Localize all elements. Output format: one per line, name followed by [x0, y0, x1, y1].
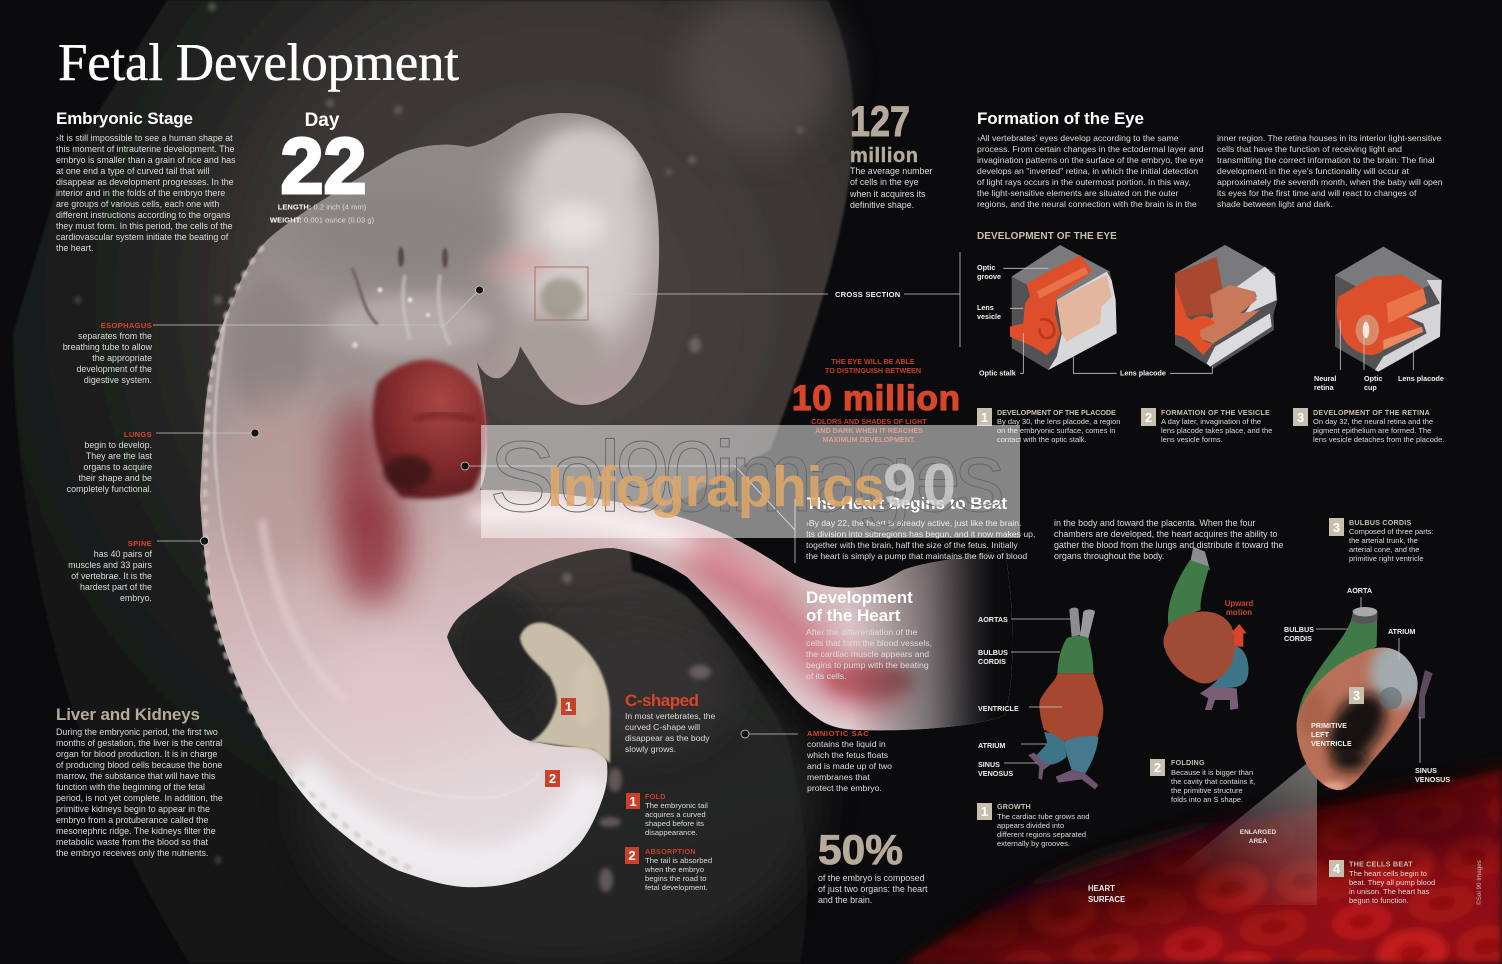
callout: amniotic sac: which the fetus floats — [806, 750, 889, 760]
day 22 badge: Day — [305, 110, 340, 131]
embryo — [200, 113, 1020, 887]
step 2: vesicle — [1141, 408, 1272, 444]
step 1: placode: contact with the optic stalk. — [997, 435, 1087, 444]
step: absorption: when the embryo — [644, 865, 704, 874]
stat: 127 million: 127 — [850, 98, 910, 146]
panel: liver and kidneys: metabolic waste from the blood so that — [56, 837, 208, 847]
heart stage 3 labels: VENOSUS — [1415, 775, 1450, 784]
callout: spine: of vertebrae. It is the — [71, 571, 152, 581]
panel: development of the heart: After the differentiation of the — [806, 627, 918, 637]
day 22 badge: WEIGHT: 0.001 ounce (0.03 g) — [270, 216, 375, 224]
tail markers — [545, 698, 576, 787]
heart stage 1 labels — [978, 615, 1070, 778]
step: folding: FOLDING — [1171, 758, 1205, 767]
panel: liver and kidneys: mesonephric ridge. The kidneys filter the — [56, 826, 216, 836]
step: folding — [1150, 758, 1255, 804]
panel: the heart begins to beat: chambers are developed, the heart acquires the ability to — [1054, 529, 1278, 539]
step 1: placode: By day 30, the lens placode, a region — [997, 417, 1120, 426]
heart surface label: SURFACE — [1088, 895, 1125, 904]
panel: embryonic stage — [56, 109, 236, 253]
copyright: ©Sol 90 Images — [1475, 860, 1483, 905]
eye diagram labels: Lens — [977, 303, 994, 312]
panel: development of the heart: cells that form the blood vessels, — [806, 638, 932, 648]
embryo body — [200, 113, 1012, 887]
tail markers: 1 — [565, 699, 572, 714]
panel: liver and kidneys: Liver and Kidneys — [56, 705, 200, 724]
callout: amniotic sac: AMNIOTIC SAC — [807, 729, 869, 738]
stat: 50 percent: of just two organs: the heart — [818, 884, 928, 894]
text block: are groups of various cells, each one with — [56, 199, 219, 209]
panel: the heart begins to beat: Its division into subregions has begun, and it now makes up, — [806, 529, 1035, 539]
panel: development of the heart: Development — [806, 588, 913, 607]
step: growth: The cardiac tube grows and — [997, 812, 1090, 821]
stat: 127 million — [849, 98, 932, 210]
step: growth: appears divided into — [997, 821, 1064, 830]
tail markers: 2 — [549, 771, 556, 786]
panel: formation of the eye: the light-sensitive elements are situated on the outer — [977, 188, 1178, 198]
callout: esophagus: the appropriate — [92, 353, 152, 363]
step: folding: the cavity that contains it, — [1171, 777, 1255, 786]
heart stage 3 labels: PRIMITIVE — [1311, 721, 1347, 730]
heart stage 3 — [1297, 607, 1433, 791]
text block: they must form. In this period, the cells of the — [56, 221, 233, 231]
callout: spine: hardest part of the — [80, 582, 152, 592]
enlarged area cone — [1160, 755, 1317, 905]
step 3: retina: pigment epithelium are formed. The — [1313, 426, 1431, 435]
callout: lungs: They are the last — [86, 451, 153, 461]
arrow: upward motion — [1231, 624, 1247, 647]
text block: different instructions according to the organs — [56, 210, 231, 220]
panel: development of the heart: the cardiac muscle appears and — [806, 649, 929, 659]
day 22 badge — [270, 110, 375, 224]
watermark panel: Sol90images — [489, 421, 1005, 533]
heart stage 1 labels: AORTAS — [978, 615, 1008, 624]
step 3: retina: 3 — [1297, 410, 1304, 425]
heart stage 1 labels: CORDIS — [978, 657, 1006, 666]
panel: the heart begins to beat: the heart is simply a pump that maintains the flow of blood — [806, 551, 1027, 561]
step 3: retina: On day 32, the neural retina and the — [1313, 417, 1433, 426]
panel: development of the heart: of the Heart — [806, 606, 901, 625]
callout: amniotic sac: contains the liquid in — [807, 739, 886, 749]
heart surface — [890, 760, 1502, 964]
step: the cells beat: 4 — [1333, 861, 1341, 876]
step: folding: Because it is bigger than — [1171, 768, 1253, 777]
callout: amniotic sac — [741, 729, 892, 793]
text block: this moment of intrauterine development. The — [56, 144, 234, 154]
panel: C-shaped: In most vertebrates, the — [625, 711, 715, 721]
step 3: retina: DEVELOPMENT OF THE RETINA — [1313, 408, 1430, 417]
heart stage 3 labels: ATRIUM — [1388, 627, 1415, 636]
text block: embryo is smaller than a grain of rice and has — [56, 155, 236, 165]
panel: the heart begins to beat: gather the blood from the lungs and distribute it toward the — [1054, 540, 1283, 550]
eye diagram labels: retina — [1314, 383, 1335, 392]
step: absorption: The tail is absorbed — [645, 856, 712, 865]
stat: 10 million: MAXIMUM DEVELOPMENT. — [822, 435, 916, 444]
callout: lungs: their shape and be — [78, 473, 152, 483]
stat: 50 percent: 50% — [818, 826, 903, 873]
panel: formation of the eye: Formation of the Eye — [977, 109, 1144, 128]
panel: C-shaped: C-shaped — [625, 691, 699, 710]
panel: formation of the eye: inner region. The retina houses in its interior light-sensitive — [1217, 133, 1442, 143]
heart stage 3 labels: LEFT — [1311, 730, 1330, 739]
panel: development of the heart: begins to pump with the beating — [806, 660, 929, 670]
step 2: vesicle: FORMATION OF THE VESICLE — [1161, 408, 1270, 417]
step: growth: different regions separated — [997, 830, 1086, 839]
step: growth: 1 — [981, 804, 988, 819]
panel: formation of the eye: approximately the seventh month, when the baby will open — [1217, 177, 1443, 187]
heart stage 3 labels: BULBUS — [1284, 625, 1314, 634]
text block: ›It is still impossible to see a human shape at — [56, 133, 233, 143]
stat: 10 million: 10 million — [792, 379, 960, 418]
eye diagram 1 — [1010, 245, 1117, 370]
text block: the heart. — [56, 243, 94, 253]
callout: esophagus: digestive system. — [84, 375, 152, 385]
step: absorption: ABSORPTION — [645, 847, 696, 856]
heart stage 1 labels: BULBUS — [978, 648, 1008, 657]
step: fold: disappearance. — [645, 828, 698, 837]
eye diagram labels: Optic stalk — [979, 368, 1016, 378]
step: bulbus cordis — [1329, 518, 1434, 563]
panel: the heart begins to beat — [806, 494, 1283, 561]
eye diagram labels: vesicle — [977, 312, 1001, 321]
step: growth: externally by grooves. — [997, 839, 1070, 848]
heart stage 1: growth — [1028, 608, 1103, 789]
callout: spine: has 40 pairs of — [94, 549, 153, 559]
callout: spine: embryo. — [120, 593, 152, 603]
step 1: placode: 1 — [981, 410, 988, 425]
panel: C-shaped — [625, 691, 715, 754]
step: the cells beat: THE CELLS BEAT — [1349, 860, 1413, 868]
panel: liver and kidneys: embryo from a protuberance called the — [56, 815, 208, 825]
step: folding: the primitive structure — [1171, 786, 1243, 795]
step 1: placode: DEVELOPMENT OF THE PLACODE — [997, 408, 1116, 417]
eye diagram labels: Optic — [1364, 374, 1382, 383]
panel: formation of the eye: develops an "inverted" retina, in which the initial detection — [977, 166, 1198, 176]
eye diagram labels: Neural — [1314, 374, 1336, 383]
step: bulbus cordis: BULBUS CORDIS — [1349, 518, 1412, 527]
panel: C-shaped: disappear as the body — [625, 733, 710, 743]
panel: liver and kidneys: of producing blood cells because the bone — [56, 760, 222, 770]
stat: 50 percent: of the embryo is composed — [818, 873, 925, 883]
stat: 127 million: when it acquires its — [849, 189, 926, 199]
panel: liver and kidneys: During the embryonic period, the first two — [56, 727, 218, 737]
stat: 10 million — [792, 357, 960, 444]
callout line: heart — [461, 462, 795, 563]
watermark panel: Infographics — [547, 455, 885, 519]
text block: disappear as development progresses. In the — [56, 177, 234, 187]
step 2: vesicle: lens placode takes place, and the — [1161, 426, 1272, 435]
step: bulbus cordis: 3 — [1333, 520, 1340, 535]
enlarged area label: AREA — [1249, 838, 1268, 845]
tail C-shape — [520, 623, 610, 763]
panel: liver and kidneys: function with the beginning of the fetal — [56, 782, 205, 792]
enlarged area label: ENLARGED — [1240, 829, 1277, 836]
panel: development of the heart: of its cells. — [806, 671, 847, 681]
panel: formation of the eye — [977, 109, 1443, 242]
callout: amniotic sac: membranes that — [807, 772, 870, 782]
eye diagram labels: groove — [977, 272, 1001, 281]
day 22 badge: LENGTH: 0.2 inch (4 mm) — [278, 202, 367, 212]
stat: 127 million: The average number — [850, 166, 932, 176]
eye diagram 2 — [1175, 245, 1277, 368]
panel: the heart begins to beat: together with the brain, half the size of the fetus. Initially — [806, 540, 1018, 550]
panel: C-shaped: slowly grows. — [625, 744, 676, 754]
panel: formation of the eye: transmitting the correct information to the brain. The final — [1217, 155, 1435, 165]
text block: cardiovascular system initiate the beating of — [56, 232, 229, 242]
heart surface label: HEART — [1088, 884, 1115, 893]
step 1: placode — [977, 408, 1120, 444]
embryo shading — [215, 130, 1020, 868]
panel: the heart begins to beat: The Heart Begins to Beat — [806, 494, 1007, 513]
stat: 10 million: TO DISTINGUISH BETWEEN — [825, 366, 921, 375]
heart stage 3 labels: SINUS — [1415, 766, 1437, 775]
callout: spine: SPINE — [128, 539, 152, 548]
callout: lungs: completely functional. — [67, 484, 152, 494]
heart stage 1 labels: VENTRICLE — [978, 704, 1019, 713]
eye diagram labels: cup — [1364, 383, 1377, 392]
panel: formation of the eye: regions, and the neural connection with the brain is in the — [977, 199, 1197, 209]
panel: formation of the eye: development in the eye's functionality will occur at — [1217, 166, 1410, 176]
heart stage 1 labels: VENOSUS — [978, 769, 1013, 778]
callout: amniotic sac: and is made up of two — [807, 761, 892, 771]
cross section marker: CROSS SECTION — [835, 290, 900, 299]
panel: formation of the eye: its eyes for the first time and will react to changes of — [1217, 188, 1417, 198]
step: growth — [977, 802, 1090, 848]
stat: 127 million: of cells in the eye — [850, 177, 919, 187]
panel: liver and kidneys — [56, 705, 223, 858]
step: the cells beat: in unison. The heart has — [1349, 887, 1430, 896]
eye diagram labels: Lens placode — [1398, 374, 1444, 383]
eye diagram leader lines — [1003, 268, 1413, 373]
panel: formation of the eye: DEVELOPMENT OF THE EYE — [977, 231, 1117, 242]
panel: formation of the eye: ›All vertebrates' eyes develop according to the same — [977, 133, 1179, 143]
panel: formation of the eye: process. From certain changes in the ectodermal layer and — [977, 144, 1204, 154]
amniotic sac — [13, 0, 854, 964]
heart stage 3 labels: VENTRICLE — [1311, 739, 1352, 748]
panel: formation of the eye: of light rays occurs in the outermost portion. In this way, — [977, 177, 1191, 187]
step: fold: shaped before its — [645, 819, 704, 828]
upward motion label: Upward — [1225, 599, 1254, 608]
cross section marker — [535, 252, 960, 347]
step: bulbus cordis: arterial cone, and the — [1349, 545, 1419, 554]
day 22 badge: 22 — [280, 121, 366, 210]
heart stage 2: folding — [1163, 547, 1249, 710]
floating particles — [75, 3, 803, 892]
panel: formation of the eye: shade between light and dark. — [1217, 199, 1333, 209]
callout: esophagus: breathing tube to allow — [63, 342, 153, 352]
step 2: vesicle: 2 — [1145, 410, 1152, 425]
panel: the heart begins to beat: in the body and toward the placenta. When the four — [1054, 518, 1255, 528]
eye diagram labels: Lens placode — [1120, 368, 1166, 378]
stat: 10 million: THE EYE WILL BE ABLE — [831, 357, 915, 366]
callout: lungs — [67, 429, 259, 494]
panel: liver and kidneys: months of gestation, the liver is the central — [56, 738, 222, 748]
step: the cells beat: begun to function. — [1349, 896, 1409, 905]
gill arches — [352, 247, 450, 348]
callout: lungs: begin to develop. — [84, 440, 152, 450]
heart stage 3 labels: CORDIS — [1284, 634, 1312, 643]
callout: esophagus — [63, 286, 484, 385]
panel: liver and kidneys: the embryo receives only the nutrients. — [56, 848, 208, 858]
watermark panel: 90 — [883, 452, 956, 519]
stat: 10 million: COLORS AND SHADES OF LIGHT — [811, 417, 927, 426]
panel: the heart begins to beat: ›By day 22, the heart is already active, just like the brain. — [806, 518, 1021, 528]
text block: interior and in the folds of the embryo there — [56, 188, 225, 198]
step: bulbus cordis: Composed of three parts: — [1349, 527, 1434, 536]
step 2: vesicle: lens vesicle forms. — [1161, 435, 1223, 444]
stat: 50 percent — [818, 826, 928, 905]
step: the cells beat — [1329, 860, 1435, 905]
step: folding: 2 — [1154, 760, 1161, 775]
step: absorption: fetal development. — [645, 883, 708, 892]
step: the cells beat: beat. They all pump blood — [1349, 878, 1435, 887]
step: fold: 1 — [629, 794, 637, 809]
step: fold: FOLD — [645, 792, 666, 801]
panel: liver and kidneys: period, is not yet complete. In addition, the — [56, 793, 223, 803]
callout: lungs: organs to acquire — [83, 462, 152, 472]
panel: the heart begins to beat: organs throughout the body. — [1054, 551, 1164, 561]
panel: liver and kidneys: organ for blood production. It is in charge — [56, 749, 217, 759]
heading: Embryonic Stage — [56, 109, 193, 128]
title: Fetal Development — [58, 34, 459, 92]
panel: formation of the eye: cells that have the function of receiving light and — [1217, 144, 1402, 154]
stat: 50 percent: and the brain. — [818, 895, 872, 905]
callout: spine — [68, 537, 208, 603]
callout: esophagus: separates from the — [78, 331, 152, 341]
step 2: vesicle: A day later, invagination of the — [1161, 417, 1261, 426]
step: bulbus cordis: primitive right ventricle — [1349, 554, 1424, 563]
heart stage 1 labels: ATRIUM — [978, 741, 1005, 750]
callout: esophagus: ESOPHAGUS — [101, 321, 152, 330]
step: the cells beat: The heart cells begin to — [1349, 869, 1427, 878]
heart bulge — [373, 360, 487, 499]
step: folding: folds into an S shape. — [1171, 795, 1243, 804]
panel: development of the heart — [806, 588, 932, 681]
callout: amniotic sac: protect the embryo. — [807, 783, 882, 793]
panel: formation of the eye: invagination patterns on the surface of the embryo, the eye — [977, 155, 1204, 165]
step: fold: acquires a curved — [645, 810, 706, 819]
stat: 10 million: AND DARK WHEN IT REACHES — [815, 426, 923, 435]
panel: liver and kidneys: primitive kidneys begin to appear in the — [56, 804, 210, 814]
panel: liver and kidneys: marrow, the substance that will have this — [56, 771, 216, 781]
step: absorption — [625, 847, 712, 892]
heart stage 3 labels — [1284, 586, 1450, 784]
eye diagram labels — [977, 263, 1444, 392]
eye diagram labels: Optic — [977, 263, 995, 272]
text block: at one end a type of curved tail that will — [56, 166, 209, 176]
step: fold — [626, 792, 708, 837]
step: growth: GROWTH — [997, 802, 1031, 811]
step: absorption: begins the road to — [645, 874, 707, 883]
callout: spine: muscles and 33 pairs — [68, 560, 153, 570]
step: fold: The embryonic tail — [645, 801, 708, 810]
heart stage 3 labels: AORTA — [1347, 586, 1372, 595]
spine somites — [205, 248, 410, 868]
step 3: retina: lens vesicle detaches from the placode. — [1313, 435, 1444, 444]
stat: 127 million: million — [850, 145, 918, 167]
step: absorption: 2 — [628, 848, 636, 863]
step 3: retina — [1293, 408, 1444, 444]
stat: 127 million: definitive shape. — [850, 200, 914, 210]
callout: lungs: LUNGS — [124, 430, 152, 439]
eye diagram 3 — [1335, 247, 1442, 372]
panel: C-shaped: curved C-shape will — [625, 722, 700, 732]
heart stage 3 labels: 3 — [1353, 688, 1360, 703]
step: bulbus cordis: the arterial trunk, the — [1349, 536, 1418, 545]
upward motion label: motion — [1226, 608, 1252, 617]
heart stage 1 labels: SINUS — [978, 760, 1000, 769]
step 1: placode: on the embryonic surface, comes in — [997, 426, 1115, 435]
callout: esophagus: development of the — [76, 364, 152, 374]
